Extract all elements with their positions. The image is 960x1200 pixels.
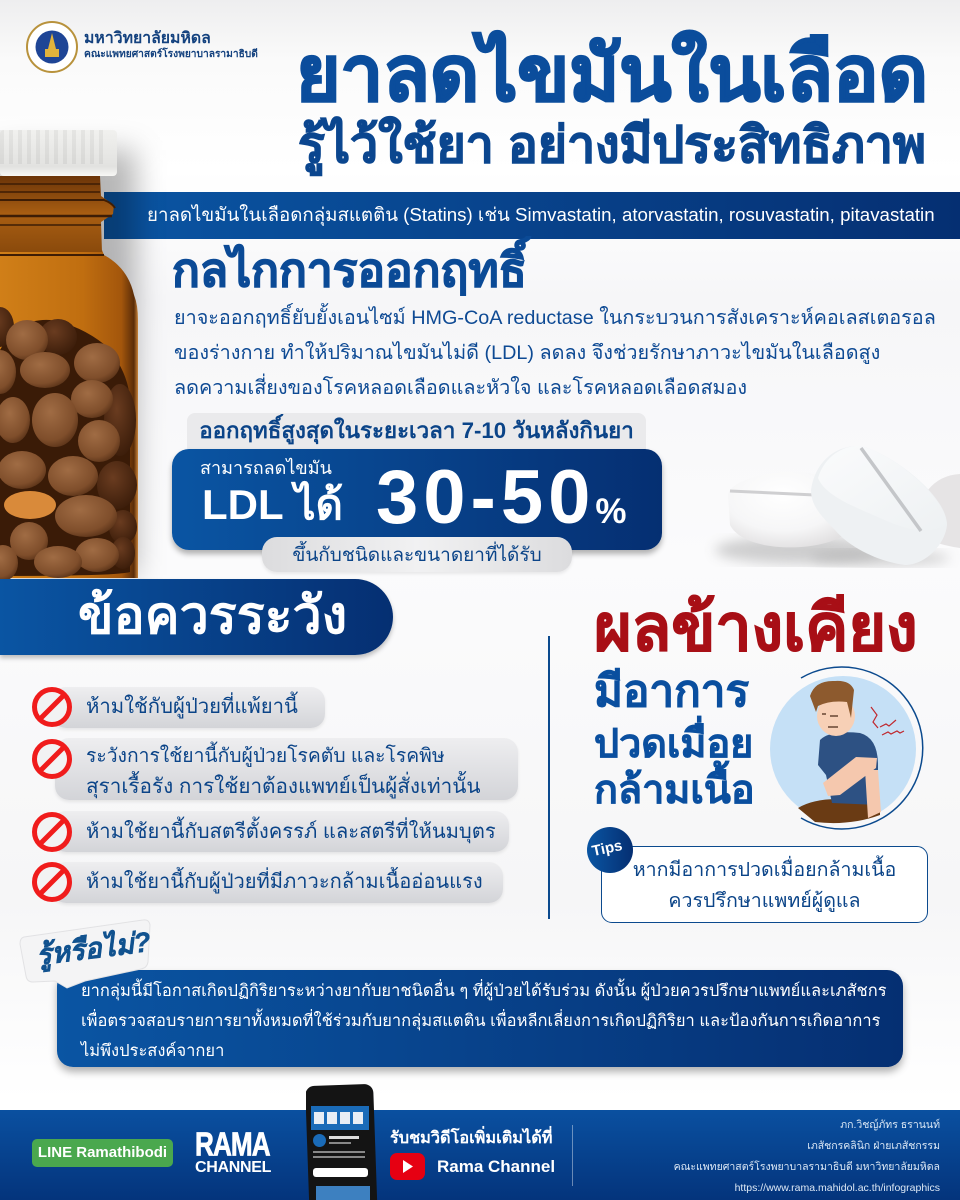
tips label: Tips [590,837,624,860]
peak effect label [187,413,646,463]
LINE badge [32,1139,173,1167]
mechanism text: ยาจะออกฤทธิ์ยับยั้งเอนไซม์ HMG-CoA reductase ในกระบวนการสังเคราะห์คอเลสเตอรอล [174,307,936,329]
phone [306,1084,378,1200]
caution row 4 [32,862,503,905]
icon: prohibition 3 [32,812,72,852]
Rama Channel label: Rama Channel [437,1157,555,1176]
did you know speech bubble [20,920,150,988]
tips box [601,846,928,923]
university logo [26,21,78,73]
icon: YouTube [390,1153,425,1180]
Rama channel logo: CHANNEL [195,1159,271,1176]
credits: ภก.วิชญ์ภัทร ธรานนท์ [840,1119,940,1131]
LDL label: LDL ได้ [202,481,343,528]
caution row 1 [32,687,325,730]
side effect heading: ผลข้างเคียง [594,592,918,664]
icon: prohibition 2 [32,739,72,779]
credits: คณะแพทยศาสตร์โรงพยาบาลรามาธิบดี มหาวิทยาลัยมหิดล [674,1161,940,1173]
caution heading: ข้อควรระวัง [78,587,347,645]
mechanism heading: กลไกการออกฤทธิ์ [172,244,527,296]
tips text: หากมีอาการปวดเมื่อยกล้ามเนื้อ [633,859,896,881]
caution row 3 [32,811,509,854]
video invitation: รับชมวิดีโอเพิ่มเติมได้ที่ [390,1129,552,1147]
LDL caption: สามารถลดไขมัน [200,458,332,478]
tips text: ควรปรึกษาแพทย์ผู้ดูแล [668,890,861,912]
pill bottle [0,130,138,579]
row 1 background [52,687,325,728]
icon: prohibition 1 [32,687,72,727]
row 2 text: สุราเรื้อรัง การใช้ยาต้องแพทย์เป็นผู้สั่งเท่านั้น [86,775,481,798]
did you know text: ยากลุ่มนี้มีโอกาสเกิดปฏิกิริยาระหว่างยากับยาชนิดอื่น ๆ ที่ผู้ป่วยได้รับร่วม ดังนั้น ผู้ป่วยควรปรึกษาแพทย์และเภสัชกร [81,982,887,1000]
did you know text: ไม่พึงประสงค์จากยา [81,1042,224,1060]
LINE text: LINE Ramathibodi [38,1144,167,1161]
did you know text: เพื่อตรวจสอบรายการยาทั้งหมดที่ใช้ร่วมกับยากลุ่มสแตติน เพื่อหลีกเลี่ยงการเกิดปฏิกิริยา และป้องกันการเกิดอาการ [81,1012,880,1030]
row 2 background [55,738,518,800]
subtitle: รู้ไว้ใช้ยา อย่างมีประสิทธิภาพ [298,117,926,173]
symptom text: กล้ามเนื้อ [594,768,755,812]
mechanism text: ของร่างกาย ทำให้ปริมาณไขมันไม่ดี (LDL) ลดลง จึงช่วยรักษาภาวะไขมันในเลือดสูง [174,342,880,364]
symptom text: มีอาการ [594,667,749,716]
credits [674,1118,940,1194]
credits: เภสัชกรคลินิก ฝ่ายเภสัชกรรม [807,1140,940,1152]
did you know label: รู้หรือไม่? [35,926,152,971]
peak effect text: ออกฤทธิ์สูงสุดในระยะเวลา 7-10 วันหลังกินยา [199,418,634,443]
statins text: ยาลดไขมันในเลือดกลุ่มสแตติน (Statins) เช่น Simvastatin, atorvastatin, rosuvastatin, pitavastatin [147,204,935,225]
statins band [104,192,960,239]
mechanism text [174,303,936,399]
university name: มหาวิทยาลัยมหิดล [84,30,211,47]
bottle shadow [0,150,136,575]
row 3 background [52,811,509,852]
row 4 background [52,862,503,903]
footer band [0,1110,960,1200]
title: ยาลดไขมันในเลือด [296,32,928,117]
white tablets [714,447,960,568]
row 2 text [86,742,481,798]
dose note [262,537,572,572]
symptom text [594,667,755,812]
credits: https://www.rama.mahidol.ac.th/infographics [735,1182,940,1194]
did you know text [80,978,887,1060]
divider line [548,636,550,919]
row 2 text: ระวังการใช้ยานี้กับผู้ป่วยโรคตับ และโรคพิษ [86,746,445,767]
LDL reduction panel [172,449,662,550]
footer divider [572,1125,573,1186]
caution heading panel [0,579,393,655]
row 4 text: ห้ามใช้ยานี้กับผู้ป่วยที่มีภาวะกล้ามเนื้ออ่อนแรง [86,871,483,893]
symptom text: ปวดเมื่อย [594,722,753,766]
30-50 percent: 30-50% [376,455,627,540]
tips text [633,855,896,912]
did you know panel [57,970,903,1067]
Rama logo: RAMA [195,1127,270,1164]
faculty name: คณะแพทยศาสตร์โรงพยาบาลรามาธิบดี [84,49,258,60]
tips badge [587,827,633,873]
row 1 text: ห้ามใช้กับผู้ป่วยที่แพ้ยานี้ [86,696,298,718]
illustration: man with muscle pain [770,666,924,830]
mechanism text: ลดความเสี่ยงของโรคหลอดเลือดและหัวใจ และโรคหลอดเลือดสมอง [174,377,747,399]
caution row 2 [32,738,518,802]
row 3 text: ห้ามใช้ยานี้กับสตรีตั้งครรภ์ และสตรีที่ให้นมบุตร [86,821,496,843]
dose note text: ขึ้นกับชนิดและขนาดยาที่ได้รับ [292,545,542,566]
icon: prohibition 4 [32,862,72,902]
